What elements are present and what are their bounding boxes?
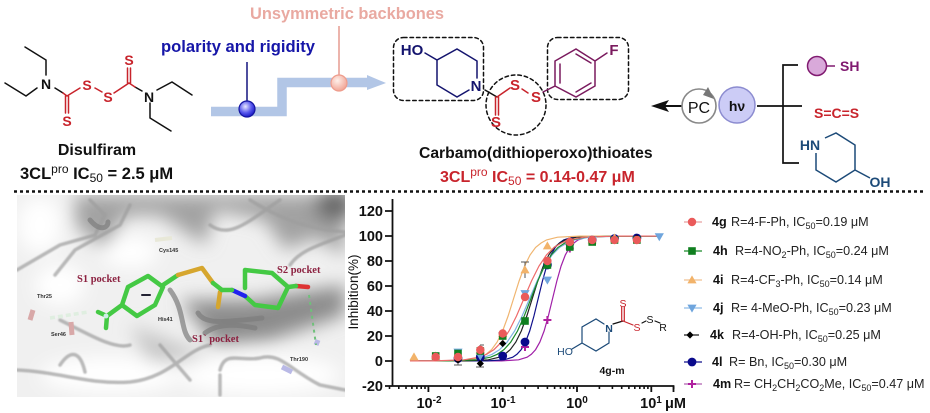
legend 4i: =0.14 μM	[830, 273, 883, 287]
optimisation arrow	[211, 26, 386, 117]
thiol reagent	[808, 56, 859, 76]
y tick labels: 0	[375, 354, 383, 370]
x tick labels	[416, 395, 662, 412]
legend 4m: 2	[795, 383, 800, 393]
error bars	[454, 262, 529, 367]
PC cycle	[682, 87, 716, 123]
legend 4g: =0.19 μM	[816, 215, 869, 229]
inset structure 4g-m: N	[605, 323, 613, 335]
carbon disulfide: S=C=S	[814, 105, 859, 121]
disulfiram activity: = 2.5 μM	[103, 165, 173, 183]
inset structure 4g-m: S	[646, 314, 654, 326]
legend 4l: 50	[784, 361, 794, 371]
inset structure 4g-m: R	[659, 322, 667, 334]
residue labels: Ser46	[51, 332, 66, 338]
legend 4m: 4m	[713, 377, 731, 391]
legend 4h: 4h	[713, 244, 728, 258]
y tick labels: -20	[362, 379, 383, 395]
legend 4m: Me, IC	[824, 377, 861, 391]
piperidinol reagent	[800, 133, 890, 190]
disulfiram activity: pro	[51, 162, 69, 176]
legend 4m	[684, 377, 925, 393]
piperidinol reagent: HN	[800, 137, 820, 153]
polarity label: polarity and rigidity	[161, 37, 316, 56]
legend 4i: 4i	[713, 273, 724, 287]
legend 4m: 2	[819, 383, 824, 393]
legend 4l: 4l	[712, 355, 723, 369]
S1 pocket label: S1 pocket	[77, 274, 121, 285]
light circle: hν	[729, 98, 745, 114]
inset structure 4g-m	[557, 298, 667, 358]
legend 4m: 50	[861, 383, 871, 393]
legend 4j: R= 4-MeO-Ph, IC	[731, 301, 829, 315]
x tick labels: -1	[507, 395, 516, 406]
legend 4i: 50	[820, 279, 830, 289]
molecule: carbamo(dithioperoxo)thioate: S	[510, 77, 520, 94]
product activity: 3CL	[440, 169, 470, 186]
product activity: pro	[470, 165, 488, 179]
y tick labels: 100	[359, 229, 383, 245]
legend	[684, 215, 925, 393]
dose-response chart	[348, 199, 685, 411]
disulfiram name: Disulfiram	[58, 142, 136, 159]
x tick labels: 10	[640, 396, 656, 412]
x tick labels: 10	[490, 396, 507, 412]
legend 4m: R= CH	[734, 377, 772, 391]
legend 4h: -Ph, IC	[787, 244, 826, 258]
inset structure 4g-m: S	[619, 298, 627, 310]
piperidinol reagent: OH	[870, 174, 890, 190]
legend 4h: 2	[782, 250, 787, 260]
inset structure 4g-m: HO	[557, 346, 573, 358]
legend 4g: R=4-F-Ph, IC	[731, 215, 806, 229]
residue labels	[37, 248, 308, 363]
y tick labels: 40	[367, 304, 383, 320]
y axis title: Inhibition(%)	[346, 254, 361, 330]
backbone label: Unsymmetric backbones	[250, 5, 444, 23]
photocatalysis scheme	[651, 56, 890, 190]
molecule: carbamo(dithioperoxo)thioate: HO	[401, 42, 424, 59]
S1' pocket label: S1` pocket	[192, 334, 239, 345]
PC cycle: PC	[688, 100, 710, 117]
disulfiram activity: 3CL	[20, 165, 51, 183]
molecule: disulfiram: N	[144, 89, 154, 105]
y tick labels: 60	[367, 279, 383, 295]
inset structure 4g-m: S	[633, 322, 641, 334]
y tick labels: 20	[367, 329, 383, 345]
y tick labels: 120	[359, 204, 383, 220]
residue labels: Thr190	[290, 357, 308, 363]
legend 4j: =0.23 μM	[839, 301, 892, 315]
molecule: carbamo(dithioperoxo)thioate	[394, 38, 628, 135]
legend 4j	[684, 301, 892, 317]
molecule: disulfiram	[5, 47, 192, 131]
molecule: disulfiram: S	[124, 52, 134, 68]
thiol reagent: SH	[840, 58, 859, 74]
legend 4i: -Ph, IC	[780, 273, 820, 287]
dashed circle: linker	[486, 75, 546, 135]
ligand	[98, 268, 308, 328]
disulfiram activity: IC	[69, 165, 90, 183]
data points	[409, 233, 664, 367]
axes	[376, 199, 674, 392]
legend 4k: =0.25 μM	[828, 328, 881, 342]
x axis unit: μM	[665, 396, 686, 412]
product activity: 50	[508, 174, 522, 188]
docking image	[17, 189, 355, 397]
legend 4m: 2	[772, 383, 777, 393]
legend 4j: 4j	[713, 301, 724, 315]
y tick labels: 80	[367, 254, 383, 270]
x tick labels: 0	[582, 395, 588, 406]
x tick labels: 10	[416, 396, 433, 412]
legend 4m: CH	[777, 377, 795, 391]
molecule: disulfiram: N	[41, 76, 51, 92]
y tick labels	[359, 204, 383, 395]
reagent bracket	[757, 65, 802, 163]
residue labels: Cys145	[159, 248, 178, 254]
legend 4m: =0.47 μM	[871, 377, 925, 391]
legend 4k: R=4-OH-Ph, IC	[732, 328, 818, 342]
legend 4g: 4g	[712, 215, 727, 229]
polarity marker	[239, 62, 255, 117]
legend 4h: R=4-NO	[735, 244, 782, 258]
molecule: carbamo(dithioperoxo)thioate: F	[609, 42, 619, 59]
legend 4g	[684, 215, 869, 231]
legend 4g: 50	[806, 221, 816, 231]
molecule: carbamo(dithioperoxo)thioate: S	[531, 89, 541, 106]
dashed box: piperidine	[394, 38, 484, 100]
molecule: disulfiram: S	[82, 77, 92, 93]
fitted curves	[410, 236, 657, 362]
inset label: 4g-m	[599, 365, 625, 377]
legend 4h: =0.24 μM	[836, 244, 889, 258]
light circle	[719, 87, 755, 123]
x tick labels: 10	[566, 396, 582, 412]
legend 4j: 50	[829, 307, 839, 317]
backbone marker	[331, 26, 347, 91]
residue labels: His41	[158, 317, 173, 323]
legend 4m: CO	[800, 377, 819, 391]
x tick labels: -2	[433, 395, 442, 406]
reaction arrow	[651, 100, 682, 112]
product name: Carbamo(dithioperoxo)thioates	[419, 145, 653, 162]
product activity: IC	[488, 169, 508, 186]
legend 4k: 50	[818, 334, 828, 344]
molecule: carbamo(dithioperoxo)thioate: N	[471, 78, 481, 95]
S2 pocket label: S2 pocket	[277, 265, 321, 276]
disulfiram activity: 50	[90, 171, 103, 185]
legend 4i: 3	[775, 279, 780, 289]
legend 4h	[684, 244, 889, 260]
legend 4l	[684, 355, 847, 371]
legend 4l: =0.30 μM	[794, 355, 847, 369]
molecule: disulfiram: S	[62, 113, 72, 129]
residue labels: Thr25	[37, 294, 52, 300]
product activity: = 0.14-0.47 μM	[521, 169, 635, 186]
molecule: disulfiram: S	[103, 89, 113, 105]
molecule: carbamo(dithioperoxo)thioate: S	[491, 114, 501, 131]
legend 4i: R=4-CF	[731, 273, 775, 287]
dashed box: aryl	[548, 38, 628, 100]
legend 4k	[684, 328, 881, 344]
legend 4i	[684, 273, 883, 289]
legend 4l: R= Bn, IC	[729, 355, 784, 369]
x tick labels: 1	[656, 395, 662, 406]
legend 4k: 4k	[710, 328, 725, 342]
legend 4h: 50	[826, 250, 836, 260]
